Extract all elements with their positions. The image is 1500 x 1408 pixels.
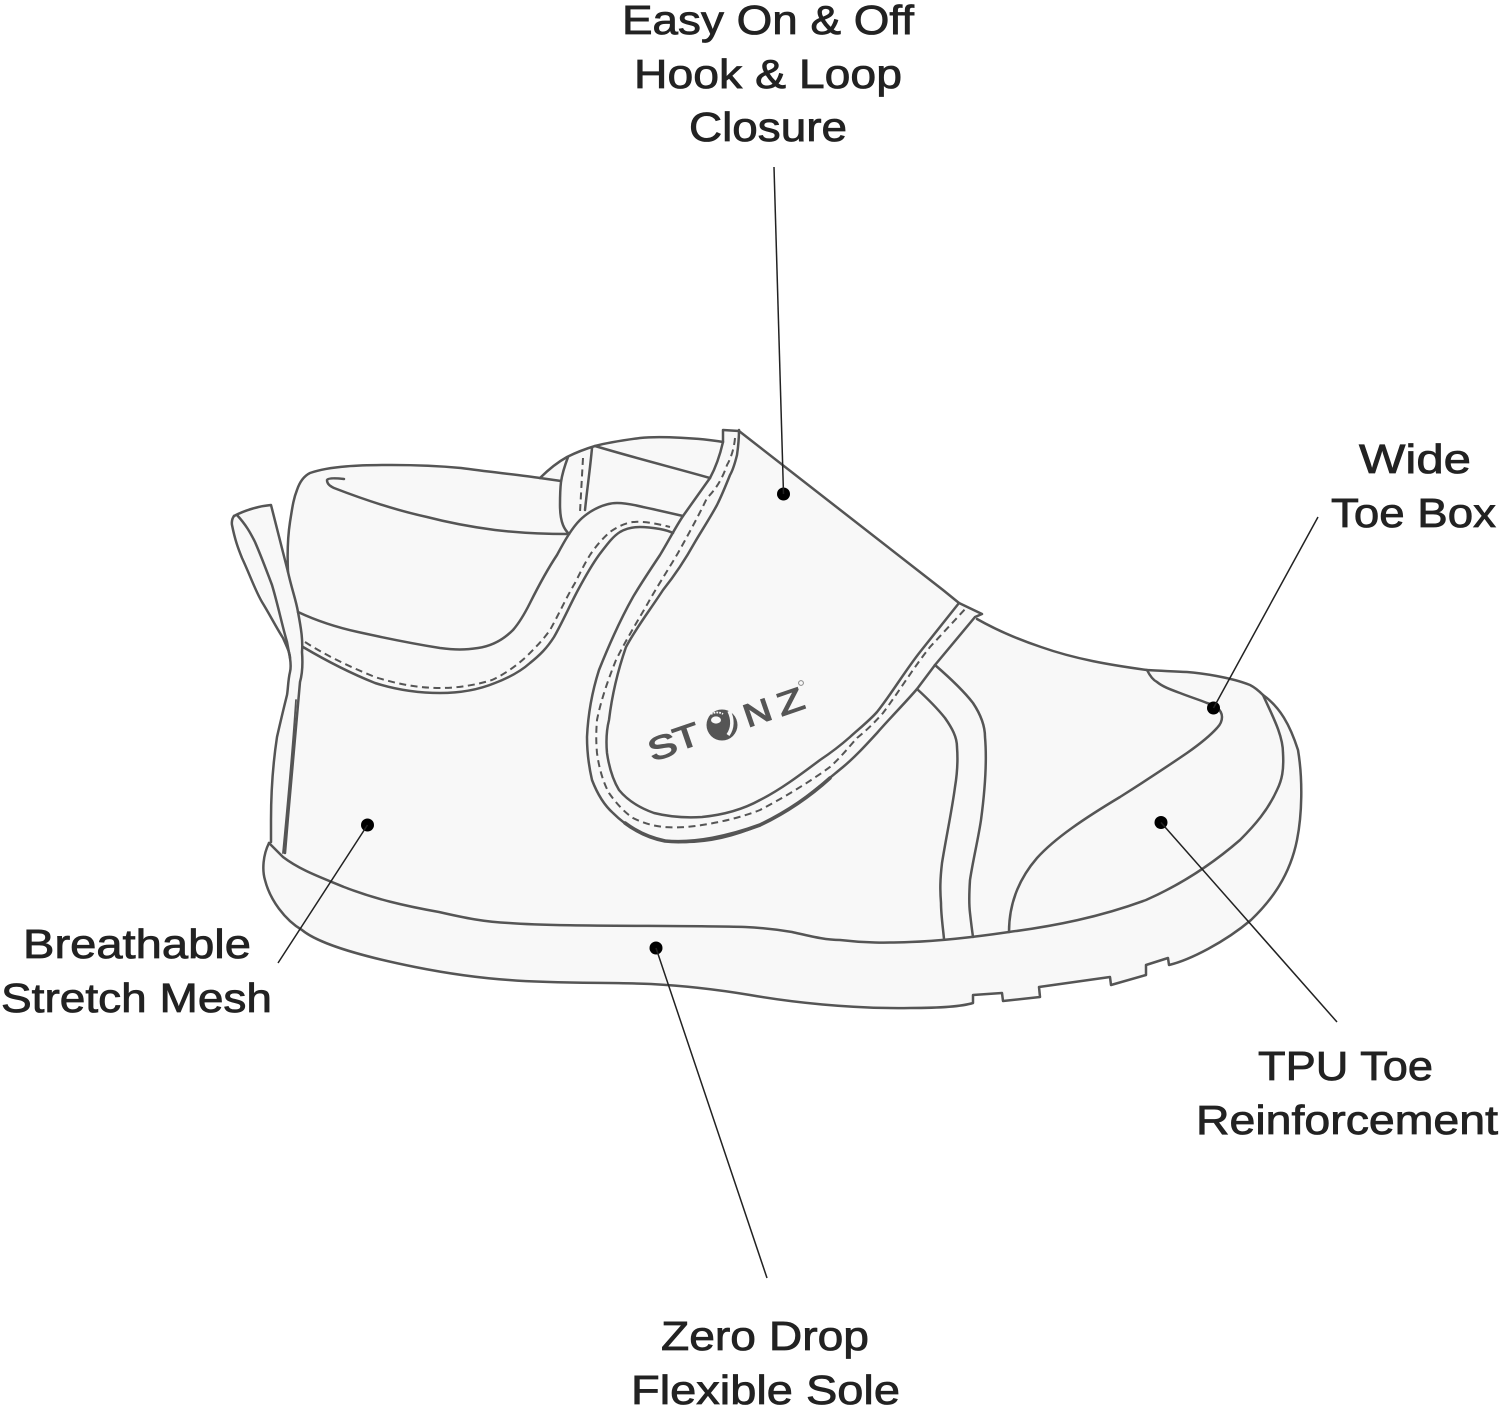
logo: Z	[772, 681, 809, 723]
sole top edge and toe cap rim	[269, 695, 1283, 943]
strap lower thick edge	[625, 778, 830, 842]
logo foot circle	[706, 710, 738, 740]
side stripe two	[935, 665, 986, 937]
sole outline	[263, 695, 1301, 1008]
strap loop	[560, 457, 569, 534]
strap outer line	[587, 430, 982, 842]
logo: N	[739, 692, 776, 734]
strap inner line	[606, 430, 959, 817]
label: breathable stretch mesh	[1, 921, 272, 1021]
collar binding inner line	[303, 527, 673, 693]
leader: TPU toe reinforcement	[1154, 816, 1337, 1022]
leader: wide toe box	[1207, 517, 1318, 714]
label: TPU toe reinforcement	[1196, 1043, 1499, 1143]
label: wide toe box: Toe Box	[1331, 490, 1497, 536]
strap stitching	[596, 438, 967, 827]
collar binding outer line	[298, 503, 683, 650]
logo	[643, 681, 809, 769]
logo: T	[668, 715, 704, 758]
label: easy on and off closure: Hook & Loop	[634, 51, 902, 97]
label: zero drop flexible sole	[631, 1313, 900, 1408]
side stripe one	[917, 689, 957, 939]
collar outline	[288, 465, 561, 572]
collar binding stitching	[305, 522, 670, 688]
label: TPU toe reinforcement: TPU Toe	[1258, 1043, 1433, 1089]
label: breathable stretch mesh: Stretch Mesh	[1, 975, 272, 1021]
leader: breathable stretch mesh	[278, 818, 374, 963]
forefoot top edge	[977, 619, 1263, 695]
label: wide toe box: Wide	[1359, 436, 1471, 482]
heel strap and pull tab	[234, 505, 302, 853]
leader: easy on and off	[774, 167, 790, 500]
shoe line drawing	[232, 430, 1301, 1008]
logo registered mark	[799, 681, 803, 685]
label: breathable stretch mesh: Breathable	[23, 921, 251, 967]
label: easy on and off closure	[622, 0, 915, 150]
collar inner lining	[327, 478, 569, 534]
label: easy on and off closure: Closure	[689, 104, 847, 150]
shoe body fill	[232, 430, 1301, 1008]
toe cap curve	[1009, 670, 1222, 932]
label: zero drop flexible sole: Zero Drop	[661, 1313, 869, 1359]
tongue back edge	[540, 437, 723, 478]
label: wide toe box	[1331, 436, 1497, 536]
logo letters: S	[643, 726, 682, 769]
label: TPU toe reinforcement: Reinforcement	[1196, 1097, 1499, 1143]
leader: zero drop sole	[650, 942, 767, 1278]
